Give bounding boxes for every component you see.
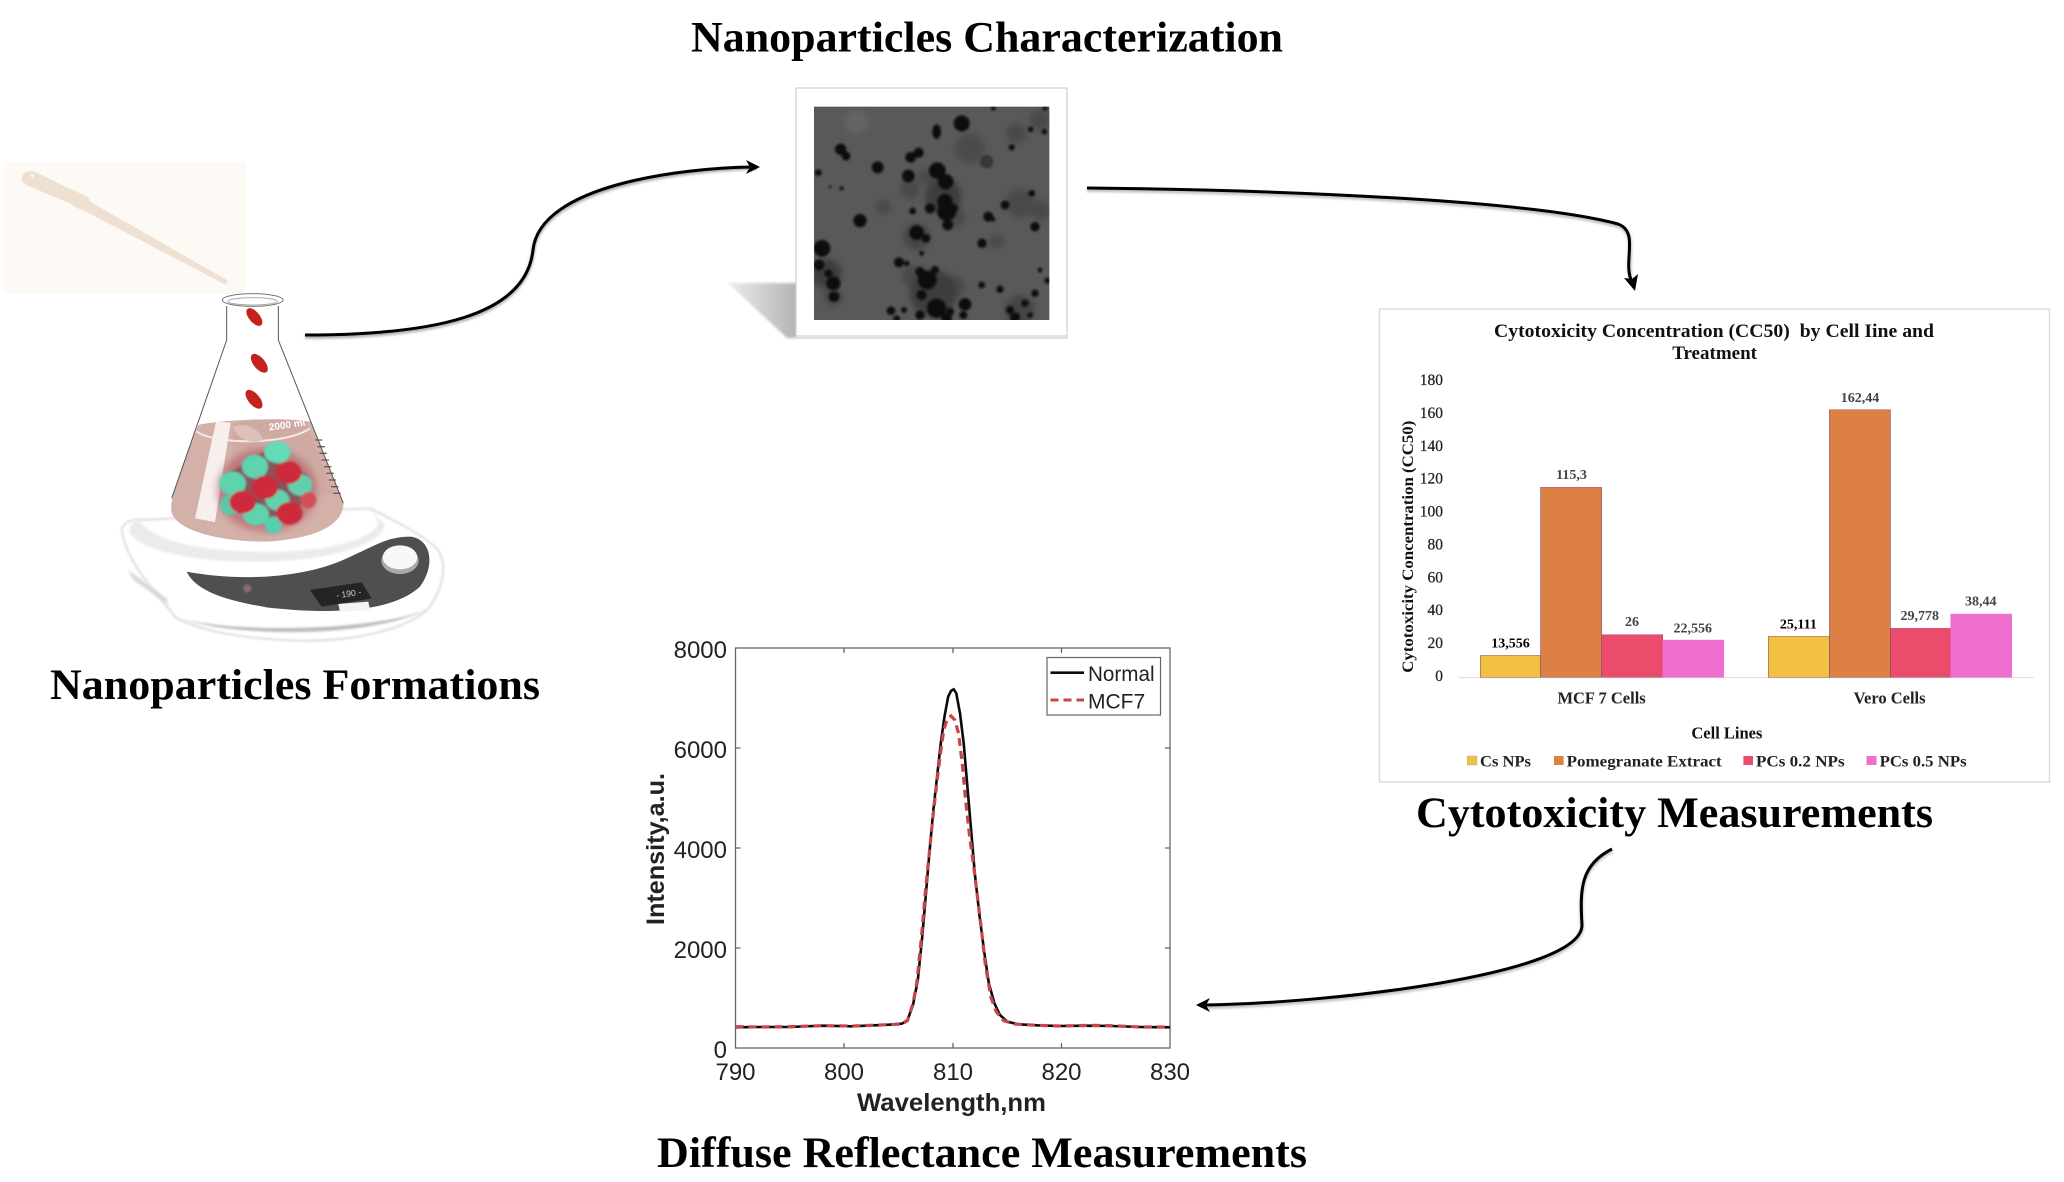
molecular nanoparticle cluster [217, 441, 317, 534]
y-axis tick labels: 120 [1420, 470, 1443, 488]
y tick labels: 4000 [674, 837, 727, 864]
y-axis tick labels: 140 [1420, 438, 1443, 455]
display panel [310, 582, 372, 612]
legend [1047, 658, 1160, 715]
y-axis tick labels: 60 [1428, 570, 1443, 586]
y-axis title: Cytotoxicity Concentration (CC50) [1400, 421, 1417, 673]
y-axis tick labels: 160 [1420, 405, 1443, 422]
y-axis tick labels: 40 [1428, 602, 1443, 619]
white reflection [195, 422, 231, 522]
y-axis tick labels: 80 [1428, 536, 1443, 554]
graduation marks [315, 440, 341, 493]
micrograph [812, 106, 1050, 325]
y tick labels: 2000 [674, 937, 727, 964]
panel: TEM micrograph in white frame [728, 88, 1067, 338]
x tick labels: 800 [824, 1059, 864, 1086]
data labels: 38,44 [1965, 594, 1997, 609]
y tick labels [674, 637, 727, 1064]
x tick labels: 790 [715, 1059, 756, 1086]
heading: Diffuse Reflectance Measurements: Diffuse Reflectance Measurements [657, 1130, 1307, 1177]
y-axis tick labels [1420, 372, 1443, 685]
display panel: - 190 - [336, 587, 362, 600]
category labels: MCF 7 Cells [1557, 688, 1646, 707]
chart legend: PCs 0.5 NPs [1880, 754, 1967, 771]
icon: Erlenmeyer flask with solution [171, 294, 343, 542]
chart legend [1467, 754, 1967, 771]
y-axis tick labels: 180 [1420, 372, 1443, 389]
panel: cytotoxicity bar chart [1380, 309, 2050, 782]
y tick labels: 0 [714, 1037, 727, 1064]
x tick labels [715, 1059, 1190, 1086]
arrow: cytotoxicity to diffuse reflectance [1196, 849, 1612, 1012]
category labels: Cell Lines [1691, 724, 1763, 743]
plot frame and ticks [736, 648, 1170, 1048]
liquid [171, 419, 343, 542]
data labels: 26 [1625, 615, 1639, 630]
y tick labels: 6000 [674, 737, 727, 764]
volume label: 2000 ml [268, 418, 306, 434]
data labels: 13,556 [1491, 636, 1530, 651]
frame shadow [728, 283, 797, 338]
curve: MCF7 [735, 716, 1170, 1027]
y-axis tick labels: 0 [1435, 668, 1443, 685]
data labels: 29,778 [1900, 609, 1939, 624]
x tick labels: 830 [1150, 1059, 1190, 1086]
illustration: pipette, flask and stirrer plate [3, 162, 443, 641]
data labels: 162,44 [1841, 391, 1879, 406]
chart title: Treatment [1672, 343, 1758, 364]
chart legend: Pomegranate Extract [1567, 754, 1722, 771]
y-axis title: Intensity,a.u. [642, 773, 670, 925]
x tick labels: 820 [1041, 1059, 1082, 1086]
category labels: Vero Cells [1854, 688, 1926, 707]
y tick labels: 8000 [674, 637, 727, 664]
data labels: 25,111 [1780, 617, 1817, 632]
bars [1459, 410, 2034, 678]
data labels [1491, 391, 1997, 651]
icon: control knob [381, 545, 419, 574]
frame [796, 88, 1067, 338]
glass outline [172, 306, 343, 503]
heading: Cytotoxicity Measurements: Cytotoxicity Measurements [1416, 790, 1933, 837]
data labels: 22,556 [1674, 621, 1712, 636]
icon: stirrer hot plate [122, 507, 443, 641]
chart title [1494, 321, 1934, 364]
chart title: Cytotoxicity Concentration (CC50) by Cell Iine and [1494, 321, 1934, 342]
legend: MCF7 [1088, 690, 1145, 714]
chart legend: PCs 0.2 NPs [1756, 754, 1845, 771]
heading: Nanoparticles Formations: Nanoparticles Formations [50, 662, 540, 709]
data labels: 115,3 [1556, 468, 1587, 483]
heading: Nanoparticles Characterization: Nanoparticles Characterization [691, 14, 1283, 62]
curve: Normal [735, 689, 1170, 1027]
legend: Normal [1088, 663, 1155, 686]
chart: diffuse reflectance spectrum [642, 637, 1190, 1117]
chart legend: Cs NPs [1480, 754, 1531, 771]
x-axis title: Wavelength,nm [857, 1089, 1046, 1117]
arrow: formation to characterization [305, 160, 760, 337]
icon: pipette [3, 162, 247, 294]
y-axis tick labels: 20 [1428, 635, 1443, 652]
x tick labels: 810 [933, 1059, 973, 1086]
y-axis tick labels: 100 [1420, 504, 1443, 520]
arrow: characterization to cytotoxicity [1087, 188, 1638, 291]
red falling drops [242, 305, 271, 412]
category labels [1557, 688, 1926, 743]
